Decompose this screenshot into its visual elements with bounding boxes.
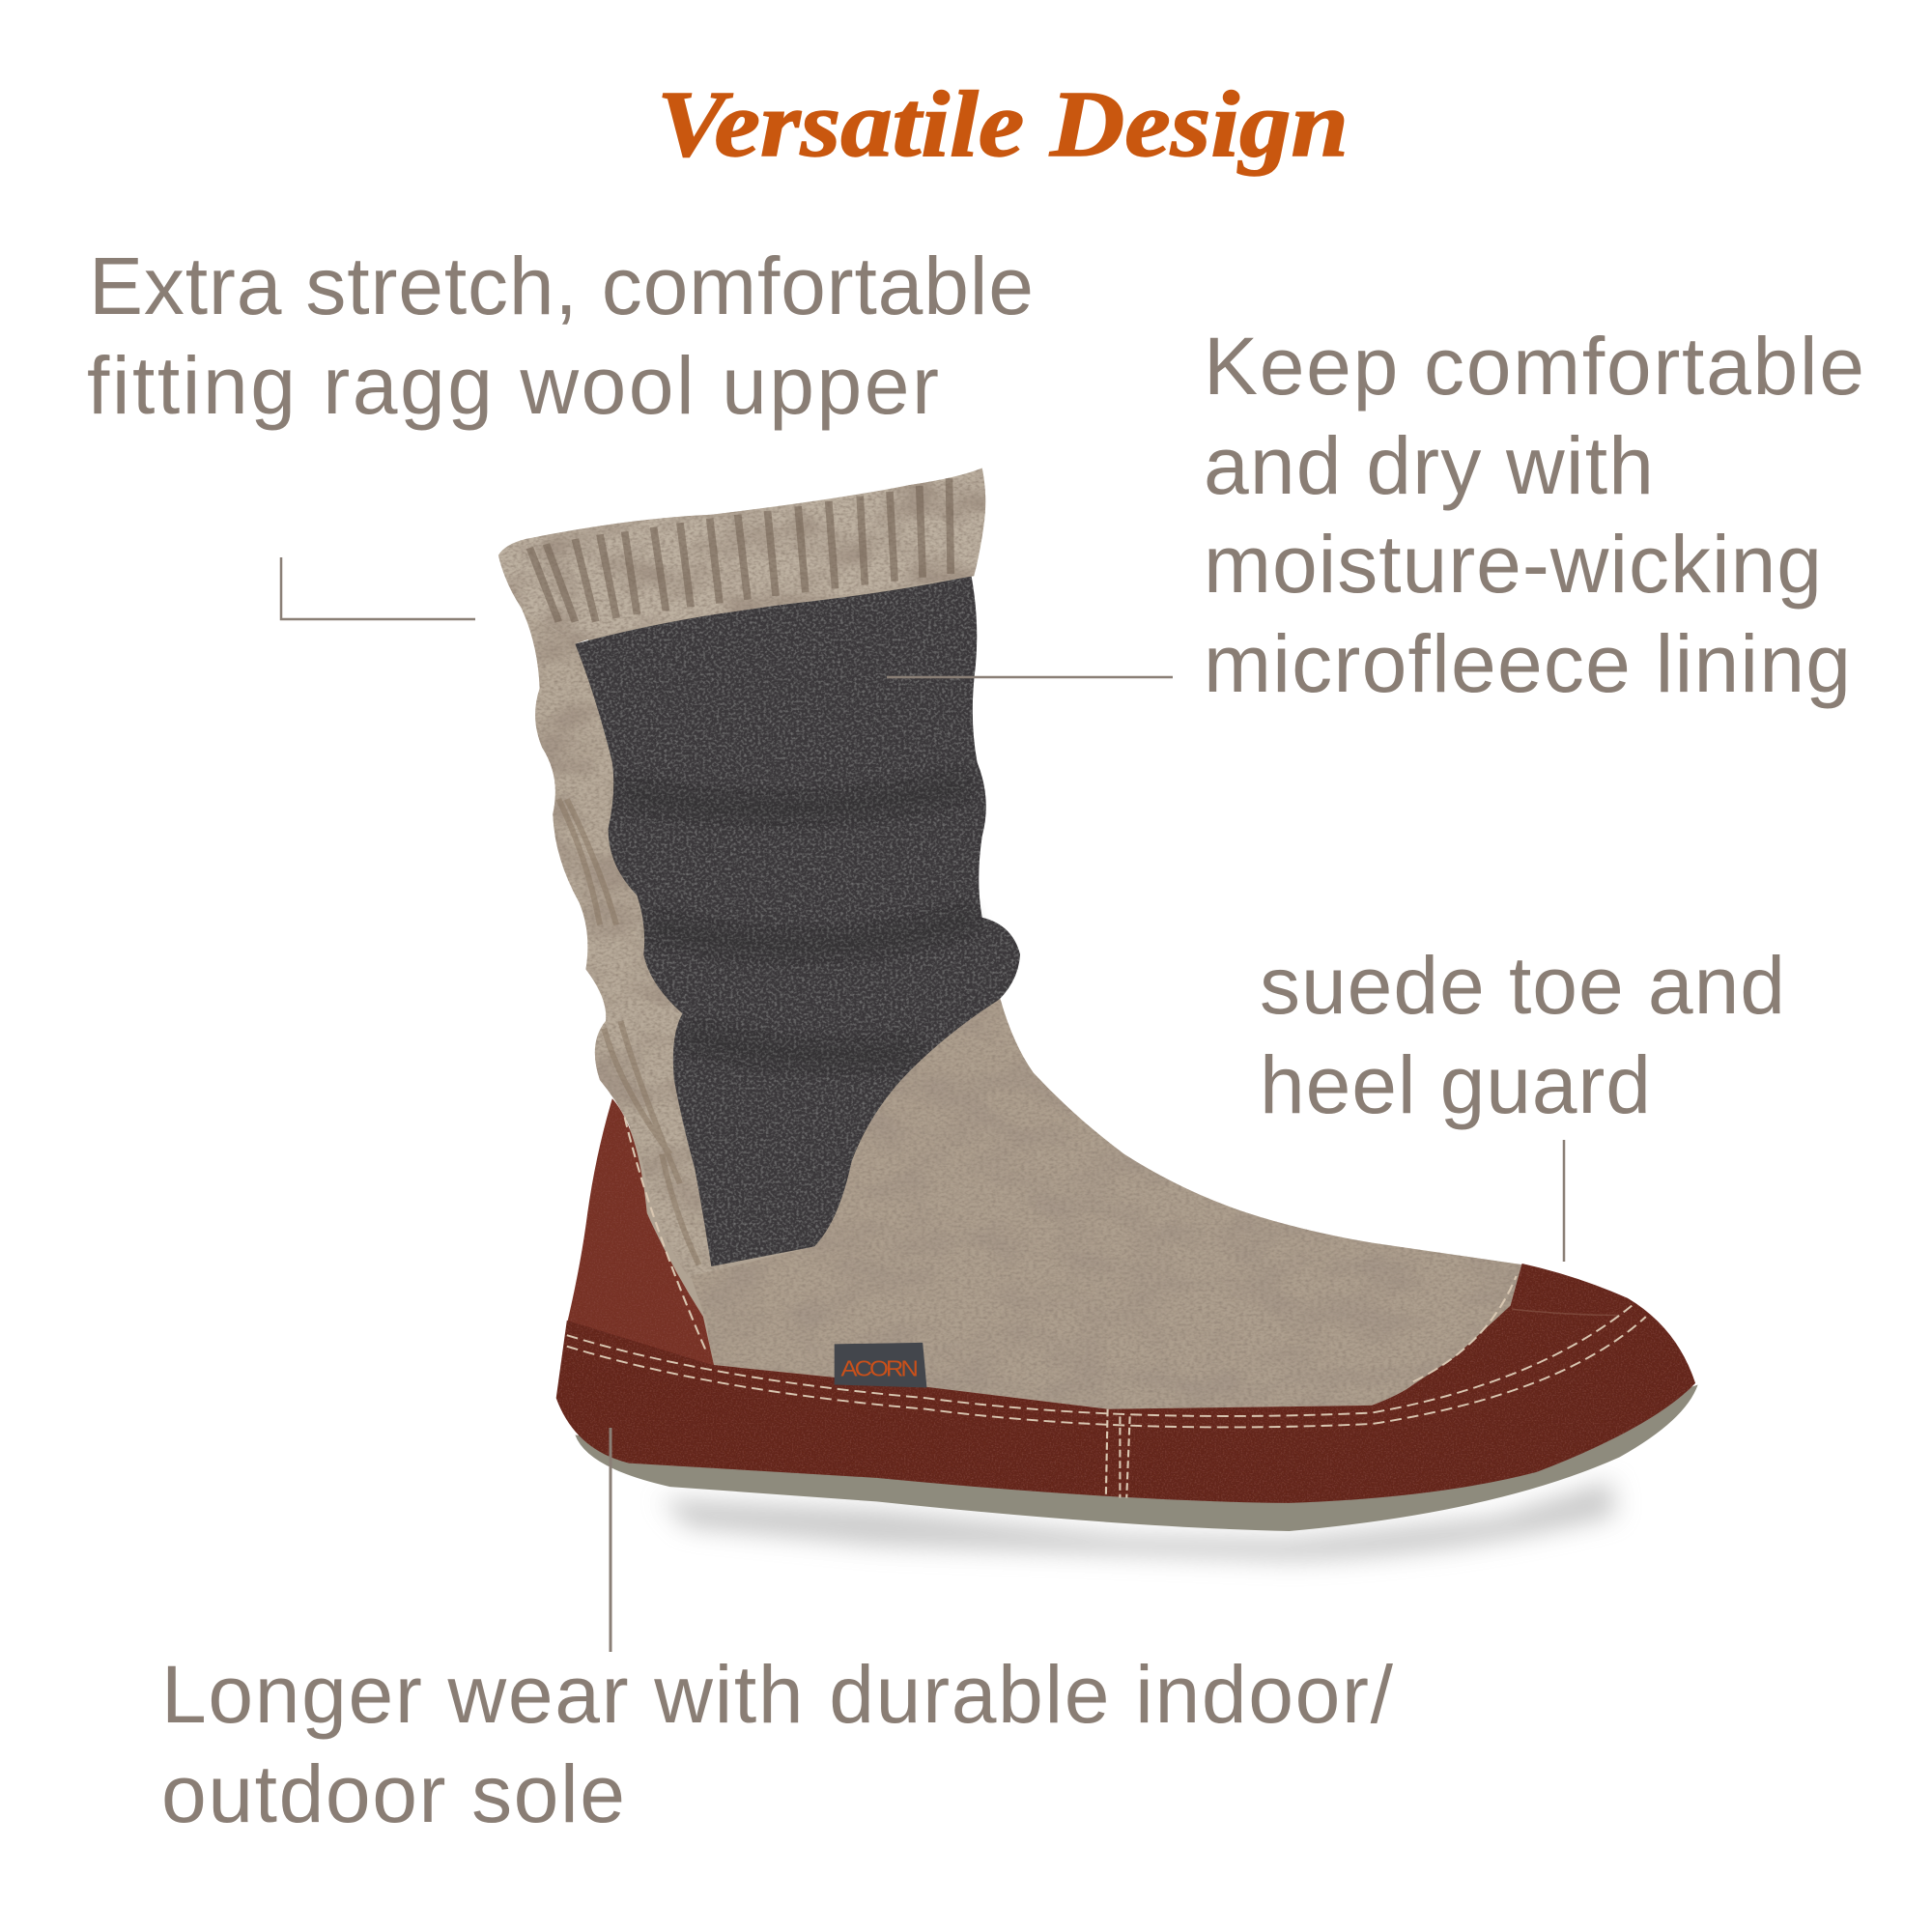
text block: durable sole [161, 1649, 1394, 1839]
callout line: upper [281, 557, 475, 619]
text block: ragg wool upper [87, 241, 1034, 431]
acorn label [835, 1343, 926, 1388]
seam [1106, 1409, 1130, 1498]
charcoal wrinkle shading [620, 784, 976, 1056]
text block: durable sole: Longer wear with durable indoor/ [161, 1649, 1394, 1740]
text block: suede toe and heel guard: suede toe and [1260, 940, 1785, 1031]
text block: ragg wool upper: Extra stretch, comfortable [89, 241, 1034, 331]
knit foot [691, 999, 1524, 1413]
acorn label: ACORN [841, 1356, 919, 1381]
stitching [567, 1117, 1646, 1427]
text block: durable sole: outdoor sole [161, 1748, 625, 1839]
charcoal knit panel [575, 576, 1020, 1266]
text block: microfleece lining: and dry with [1204, 420, 1654, 511]
suede sole band and toe cap [556, 1264, 1695, 1503]
text block: ragg wool upper: fitting ragg wool upper [87, 340, 939, 431]
suede heel guard [566, 1098, 715, 1369]
callout line: sole [609, 1428, 612, 1652]
knit underlay [587, 566, 1512, 1406]
title: Versatile Design [657, 72, 1349, 177]
back knit panel [522, 609, 727, 1280]
text block: microfleece lining [1204, 321, 1864, 709]
toe cap fold [1512, 1309, 1619, 1316]
text block: microfleece lining: moisture-wicking [1204, 519, 1822, 610]
ribbed cuff [498, 468, 985, 644]
text block: suede toe and heel guard: heel guard [1260, 1039, 1651, 1130]
text block: microfleece lining: Keep comfortable [1204, 321, 1864, 412]
callout line: lining [887, 676, 1173, 678]
rubber sole [575, 1384, 1698, 1531]
shadow under sole [662, 1479, 1615, 1561]
back rib lines [558, 799, 699, 1264]
callout line: toe guard [1563, 1140, 1565, 1262]
text block: microfleece lining: microfleece lining [1204, 618, 1851, 709]
slipper sock boot illustration [498, 468, 1698, 1561]
text block: suede toe and heel guard [1260, 940, 1785, 1130]
